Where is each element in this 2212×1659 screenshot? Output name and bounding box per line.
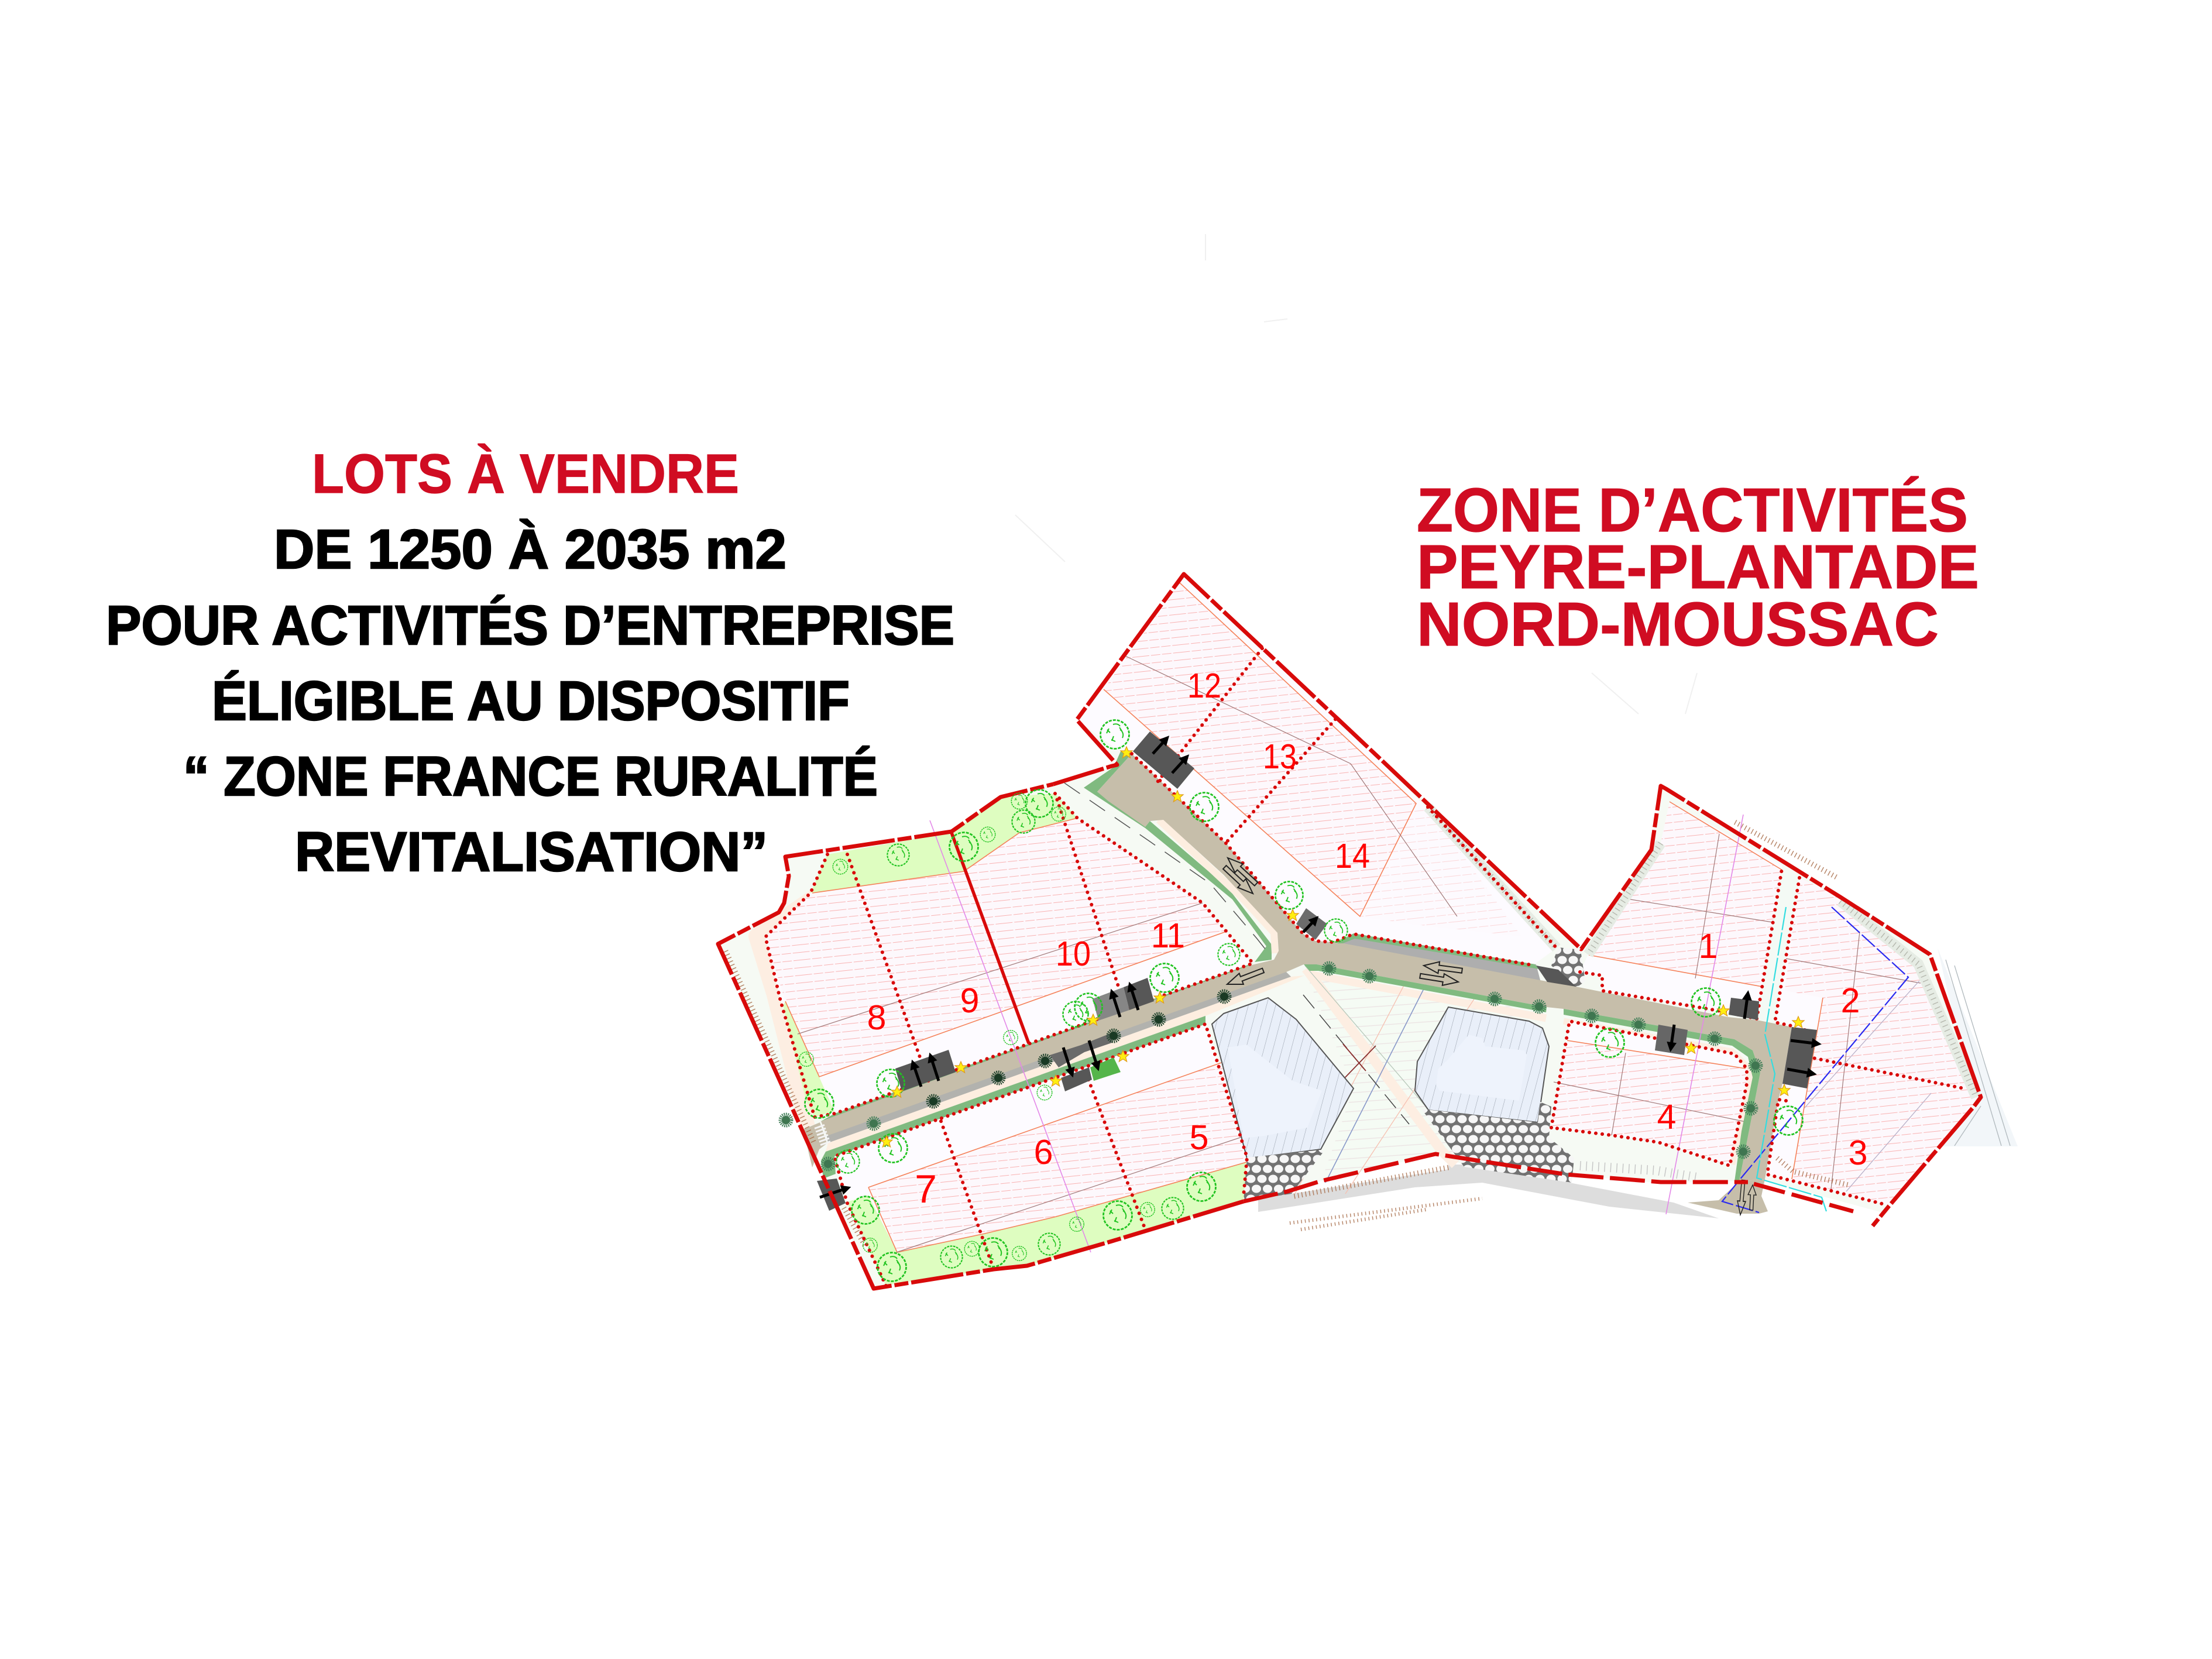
lot 1: 1 <box>1699 927 1718 966</box>
south public road <box>1258 1165 1719 1218</box>
south verge <box>821 1016 1205 1179</box>
lot 7: 7 <box>915 1167 937 1211</box>
text block: lots à vendre <box>106 443 954 883</box>
lot 1 limit <box>1580 865 1782 1019</box>
title line 2: PEYRE-PLANTADE <box>1417 533 1979 602</box>
lot 9: 9 <box>960 981 979 1020</box>
arrow <box>1671 1025 1674 1045</box>
heading: lots à vendre: LOTS À VENDRE <box>312 443 739 505</box>
south lots limit <box>834 1024 1247 1286</box>
south road stub <box>1688 1179 1768 1214</box>
marking north branch return <box>1221 863 1257 898</box>
lot 8-9 divider <box>847 854 930 1085</box>
arrow <box>1089 1040 1097 1064</box>
text: activités: POUR ACTIVITÉS D’ENTREPRISE <box>106 595 954 657</box>
riprap <box>1421 1102 1574 1183</box>
setback line <box>1104 583 1416 916</box>
marking south exit <box>1736 1180 1747 1215</box>
arrow <box>1744 997 1747 1019</box>
lot 4: 4 <box>1657 1098 1676 1136</box>
lot 3: 3 <box>1849 1134 1867 1172</box>
lot 2-3 divider <box>1798 1030 1967 1089</box>
arrow <box>1172 760 1184 773</box>
arrow <box>1303 921 1314 932</box>
lot 2: 2 <box>1841 981 1860 1020</box>
lot 10-11 divider <box>1055 794 1126 1009</box>
stormwater basin west <box>1212 998 1354 1201</box>
north swath <box>1428 807 1976 1097</box>
north dotted limits <box>1132 754 1557 966</box>
basin slope <box>1415 1007 1549 1122</box>
riprap <box>1244 1150 1323 1201</box>
central ground hatch <box>1305 971 1545 1181</box>
road band lots 5-6 <box>1050 1033 1112 1067</box>
south-east boundary <box>1754 1184 1853 1211</box>
marking east road return <box>1419 970 1459 988</box>
lighting stars <box>881 747 1804 1147</box>
arrow <box>1153 741 1165 754</box>
dark pad <box>1536 966 1576 987</box>
parking access bays <box>817 731 1817 1211</box>
east outer embankment <box>1935 948 2018 1146</box>
lot numbers <box>867 667 1867 1211</box>
peach curve <box>1159 820 1275 953</box>
faded east hatch <box>1360 803 1521 936</box>
lots 12 to 14 <box>1077 574 1557 964</box>
lot 13: 13 <box>1263 737 1297 776</box>
survey line <box>1124 655 1457 916</box>
north road verge <box>821 963 1253 1121</box>
marking north branch <box>1224 854 1260 888</box>
lot 12-13 divider <box>1156 648 1262 784</box>
lot 4 limit <box>1551 1021 1747 1166</box>
title: zone d'activités <box>1417 476 1979 659</box>
hatched buildable area <box>868 1063 1246 1252</box>
hatched buildable area <box>765 818 1226 1077</box>
lot 5: 5 <box>1190 1118 1208 1157</box>
setback lines <box>868 1063 1246 1252</box>
zebra crossing <box>819 1126 826 1146</box>
bay lots 10-11 dark half <box>1124 978 1154 1010</box>
service strip between lots 1 and 2 <box>1757 865 1799 1022</box>
text: surface des lots: DE 1250 À 2035 m2 <box>274 518 786 581</box>
lots 5 to 7 <box>834 1024 1247 1286</box>
site plan map <box>718 574 2018 1289</box>
bay lots 10-11 <box>1093 987 1129 1021</box>
embankment swaths <box>1428 807 1976 1097</box>
lot 10: 10 <box>1056 935 1091 973</box>
marking east road <box>1423 960 1463 977</box>
text: éligible: ÉLIGIBLE AU DISPOSITIF <box>212 670 850 732</box>
hatched buildable area <box>1785 878 1976 1205</box>
bay lot 14 <box>1296 908 1327 940</box>
hatched buildable area <box>1551 1040 1747 1166</box>
bay lot 4 <box>1655 1025 1688 1055</box>
title line 1: ZONE D’ACTIVITÉS <box>1417 476 1968 545</box>
central plan lines <box>1295 936 1516 1194</box>
lot 8: 8 <box>867 998 886 1037</box>
purple lines <box>930 815 1743 1252</box>
arrow <box>932 1059 939 1081</box>
plot ground <box>1767 878 1976 1205</box>
lot 1 <box>1580 802 1823 1019</box>
bay lots 12-13 <box>1133 731 1194 789</box>
survey lines <box>1554 1053 1746 1135</box>
trees <box>799 720 1802 1282</box>
south outer fence traces <box>1290 1198 1482 1229</box>
lot dividers and dotted limits <box>765 648 1967 1286</box>
arrow <box>914 1066 921 1087</box>
lot 14: 14 <box>1335 837 1370 875</box>
plot ground <box>1551 1021 1747 1166</box>
plot ground <box>834 1024 1247 1252</box>
setback line <box>1567 1040 1746 1069</box>
peach strip west road <box>826 976 1304 1152</box>
embankment lines <box>1946 960 2010 1146</box>
basin floor <box>1228 1045 1322 1138</box>
lots 2-3 limit <box>1767 878 1887 1205</box>
site ground <box>718 574 1981 1289</box>
north branch verge <box>1084 751 1272 962</box>
plot ground <box>765 818 1253 1117</box>
west and south boundary <box>718 784 1244 1289</box>
plot ground <box>1077 574 1557 964</box>
setback line <box>1589 802 1823 998</box>
boundary ticks <box>726 822 1849 1248</box>
bay lots 5-6 <box>1061 1067 1092 1091</box>
arrow <box>1131 988 1138 1010</box>
bay lot 1 <box>1729 998 1759 1020</box>
networks and survey overlay <box>930 815 1908 1252</box>
marking west road <box>1225 965 1265 990</box>
lot 4 <box>1551 1021 1747 1166</box>
carriageway <box>821 754 1792 1181</box>
lot 13-14 divider <box>1227 719 1335 842</box>
survey line <box>798 903 1203 1034</box>
access arrows <box>820 741 1815 1197</box>
north planted strip <box>810 794 1077 893</box>
hatched buildable area <box>1589 802 1782 987</box>
west lots limit <box>765 794 1253 1117</box>
lots 2 and 3 <box>1767 878 1976 1205</box>
marking south entry <box>1747 1185 1757 1210</box>
diagonal lines <box>1804 981 1931 1191</box>
plot ground <box>1580 802 1782 1019</box>
west road end <box>803 1122 827 1167</box>
lots 8 to 11 <box>765 794 1253 1117</box>
riprap north outlet <box>1551 947 1585 988</box>
lot 11: 11 <box>1151 916 1185 955</box>
hatched buildable area <box>1104 583 1416 916</box>
peach paths <box>756 895 1751 1165</box>
setback line <box>1792 998 1823 1179</box>
faint background plan traces <box>1015 234 1697 714</box>
green bay <box>1090 1057 1121 1081</box>
south dashed boundary <box>1244 1154 1748 1201</box>
edge dashes <box>1064 783 1270 956</box>
survey line <box>897 1136 1245 1252</box>
road direction markings <box>1221 854 1757 1215</box>
arrow <box>1791 1040 1815 1043</box>
cyan network <box>1757 907 1826 1211</box>
lot 5-6 divider <box>1088 1080 1145 1228</box>
bay lot 7 <box>817 1179 846 1211</box>
west planted strip <box>783 1001 834 1117</box>
ticks <box>726 822 1849 1248</box>
south planted strip <box>847 1162 1246 1286</box>
title line 3: NORD-MOUSSAC <box>1417 590 1939 659</box>
lot 6: 6 <box>1034 1133 1053 1172</box>
west road sidewalk <box>827 972 1291 1143</box>
east road parking strip <box>1340 939 1540 980</box>
arrow <box>1063 1047 1071 1071</box>
basin slope <box>1212 998 1354 1159</box>
site boundary <box>718 574 1981 1289</box>
lot 12: 12 <box>1187 667 1221 705</box>
east road verge second part <box>1564 1009 1760 1181</box>
lot 9-10 divider <box>952 833 1029 1043</box>
stormwater basin east <box>1415 1007 1574 1183</box>
bay lots 2-3 <box>1782 1027 1817 1088</box>
lot 6-7 divider <box>941 1121 994 1269</box>
roads <box>803 751 1792 1214</box>
text: revitalisation: REVITALISATION” <box>295 821 768 883</box>
solid boundary <box>1053 574 1981 1226</box>
swath texture <box>1428 807 1976 1097</box>
survey lines <box>1786 932 1921 1189</box>
setback lines <box>785 818 1226 1077</box>
road shrubs <box>781 963 1761 1169</box>
blue dashed network <box>1722 907 1908 1213</box>
arrow <box>1113 995 1120 1017</box>
east road verges <box>1304 964 1547 1012</box>
arrow <box>820 1189 844 1197</box>
bay lots 8-9 <box>895 1050 956 1091</box>
arrow <box>1787 1069 1810 1073</box>
east road north verge <box>1337 933 1539 969</box>
survey lines <box>1627 834 1773 978</box>
text: zone france ruralité: “ ZONE FRANCE RURALITÉ <box>183 746 878 808</box>
basin floor <box>1436 1035 1527 1101</box>
south parking ticks <box>1580 1166 1697 1177</box>
